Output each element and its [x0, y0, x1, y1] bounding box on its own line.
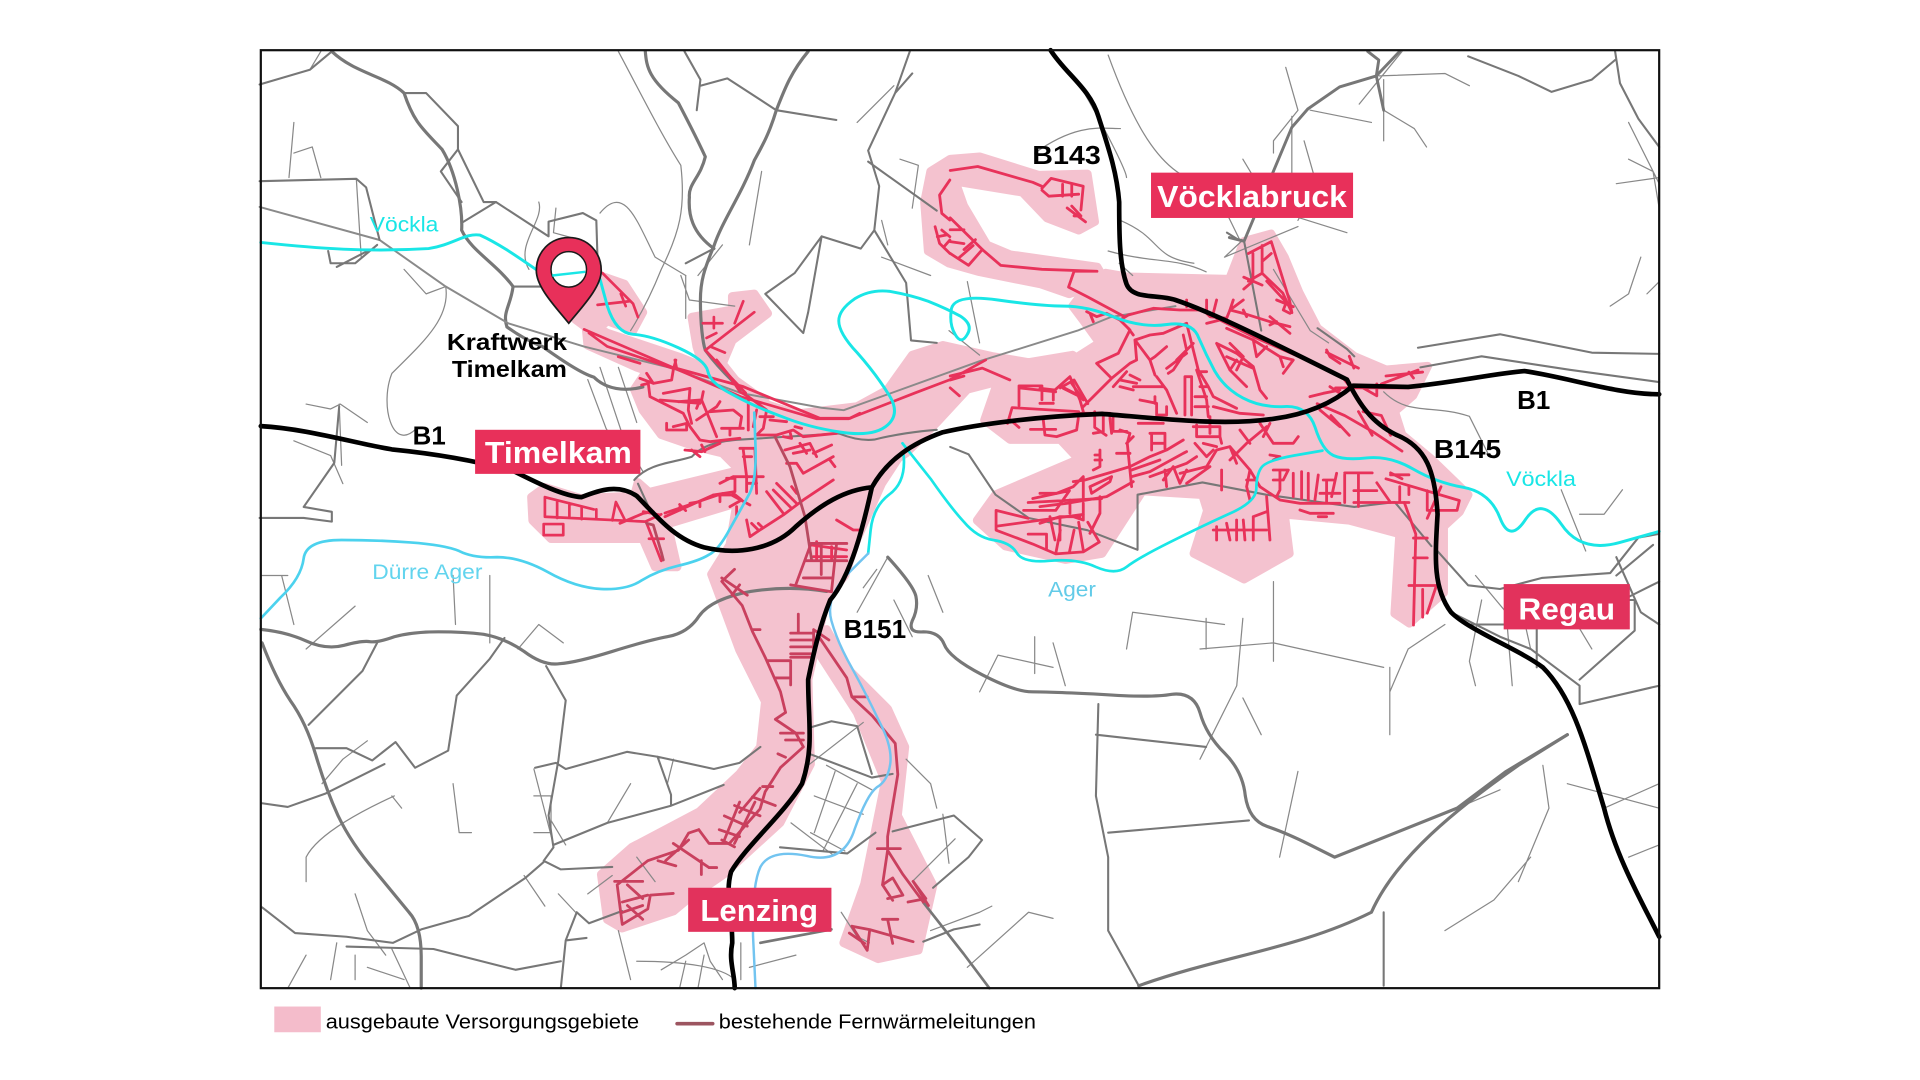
river labels: Dürre Ager [372, 561, 483, 584]
gray road network: main roads [260, 51, 1659, 988]
road labels: B1 [413, 422, 446, 450]
road labels: B143 [1032, 142, 1101, 170]
gray road network: thin roads [261, 51, 1659, 988]
river: Dürre Ager [261, 413, 756, 618]
road: B1 [261, 371, 1659, 551]
heat network: streets west [544, 167, 1459, 625]
legend: existing district heating lines: bestehende Fernwärmeleitungen [719, 1012, 1036, 1034]
heat network: east and north of Vöcklabruck [950, 167, 1459, 625]
rivers [261, 235, 1659, 988]
road labels: B145 [1434, 436, 1501, 464]
legend: supply areas: ausgebaute Versorgungsgebiete [326, 1012, 639, 1034]
road labels: B1 [1517, 387, 1550, 415]
legend: supply areas [274, 1007, 639, 1034]
map frame [261, 50, 1659, 988]
town label: Regau [1504, 584, 1630, 629]
town label: Lenzing: Lenzing [700, 894, 818, 928]
river labels: Vöckla [1506, 468, 1576, 491]
road: B143 and B145 [1051, 50, 1659, 937]
road labels: B151 [844, 616, 906, 644]
town label: Timelkam [475, 430, 640, 474]
main roads black [261, 50, 1659, 988]
town label: Regau: Regau [1518, 593, 1615, 627]
road: B151 [729, 487, 872, 988]
supply areas: pink zones [531, 157, 1468, 959]
river labels [370, 213, 1576, 601]
river labels: Vöckla [370, 213, 439, 236]
river: Vöckla [261, 235, 1659, 545]
town label: Timelkam: Timelkam [485, 436, 632, 470]
heat network: Timelkam town [618, 357, 860, 560]
icon: power plant location pin [536, 238, 601, 323]
label: Kraftwerk Timelkam: Timelkam [452, 356, 567, 382]
road labels [413, 142, 1550, 644]
town label: Vöcklabruck: Vöcklabruck [1157, 180, 1348, 214]
town label: Vöcklabruck [1151, 173, 1353, 218]
river: Ager south [753, 553, 891, 988]
river: Ager [868, 443, 1322, 571]
river labels: Ager [1048, 578, 1096, 601]
label: Kraftwerk Timelkam: Kraftwerk [447, 329, 567, 355]
panel: map [260, 50, 1659, 988]
heat network: loop block west [935, 180, 950, 253]
heat network: south streets [615, 543, 928, 950]
heat network: Vöcklabruck centre [1040, 300, 1340, 540]
legend [274, 1007, 1036, 1034]
town label: Lenzing [688, 888, 831, 932]
